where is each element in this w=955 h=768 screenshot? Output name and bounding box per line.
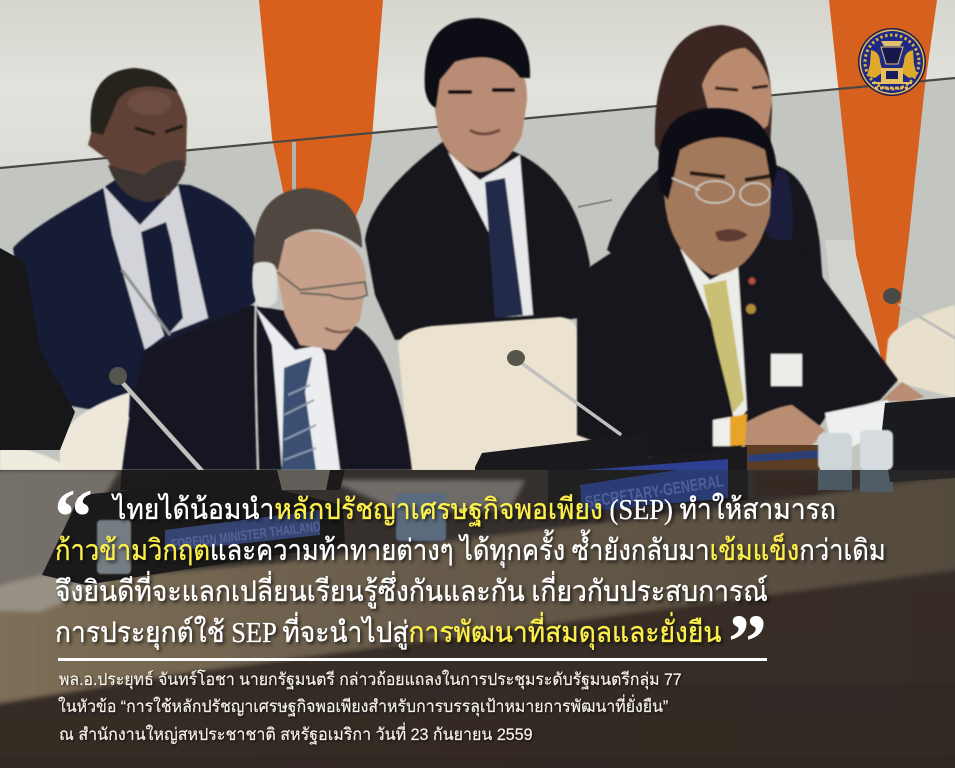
nameplate labels — [170, 471, 725, 552]
person: Prime Minister — [577, 108, 925, 458]
person: back centre man — [365, 18, 590, 340]
nameplate labels: FOREIGN MINISTER THAILAND — [170, 518, 321, 552]
chairs — [0, 305, 955, 470]
attribution text block: พล.อ.ประยุทธ์ จันทร์โอชา นายกรัฐมนตรี กล่าวถ้อยแถลงในการประชุมระดับรัฐมนตรีกลุ่ม 77 — [59, 670, 682, 689]
divider rule — [58, 658, 767, 661]
person: Ban Ki-moon — [122, 188, 412, 470]
orange panels — [259, 0, 937, 375]
attribution text block — [58, 669, 682, 746]
attribution text block: ในหัวข้อ “การใช้หลักปรัชญาเศรษฐกิจพอเพียงสำหรับการบรรลุเป้าหมายการพัฒนาที่ยั่งยืน” — [58, 697, 668, 716]
bottom overlay band — [0, 462, 955, 768]
attribution text block: ณ สำนักงานใหญ่สหประชาชาติ สหรัฐอเมริกา วันที่ 23 กันยายน 2559 — [59, 725, 533, 744]
wall — [0, 0, 955, 470]
nameplate labels: SECRETARY-GENERAL — [584, 471, 725, 512]
quote text block: ก้าวข้ามวิกฤตและความท้าทายต่างๆ ได้ทุกครั้ง ซ้ำยังกลับมาเข้มแข็งกว่าเดิม — [55, 535, 886, 567]
person: left man — [13, 68, 258, 420]
glass rail — [0, 78, 955, 207]
microphones — [109, 288, 955, 482]
person: woman back right — [607, 25, 824, 300]
opening quotation mark: “ — [54, 473, 93, 560]
quote text block: การประยุกต์ใช้ SEP ที่จะนำไปสู่การพัฒนาที่สมดุลและยั่งยืน — [55, 617, 721, 649]
person: far left shoulder — [0, 248, 75, 450]
quote text block: จึงยินดีที่จะแลกเปลี่ยนเรียนรู้ซึ่งกันและกัน เกี่ยวกับประสบการณ์ — [55, 576, 768, 608]
nameplates and desk above overlay — [475, 397, 955, 470]
quote text block: ไทยได้น้อมนำหลักปรัชญาเศรษฐกิจพอเพียง (SEP) ทำให้สามารถ — [113, 494, 836, 526]
quote text block — [55, 492, 887, 653]
closing quotation mark: ” — [728, 598, 767, 685]
emblem: Thai government seal — [858, 28, 926, 96]
